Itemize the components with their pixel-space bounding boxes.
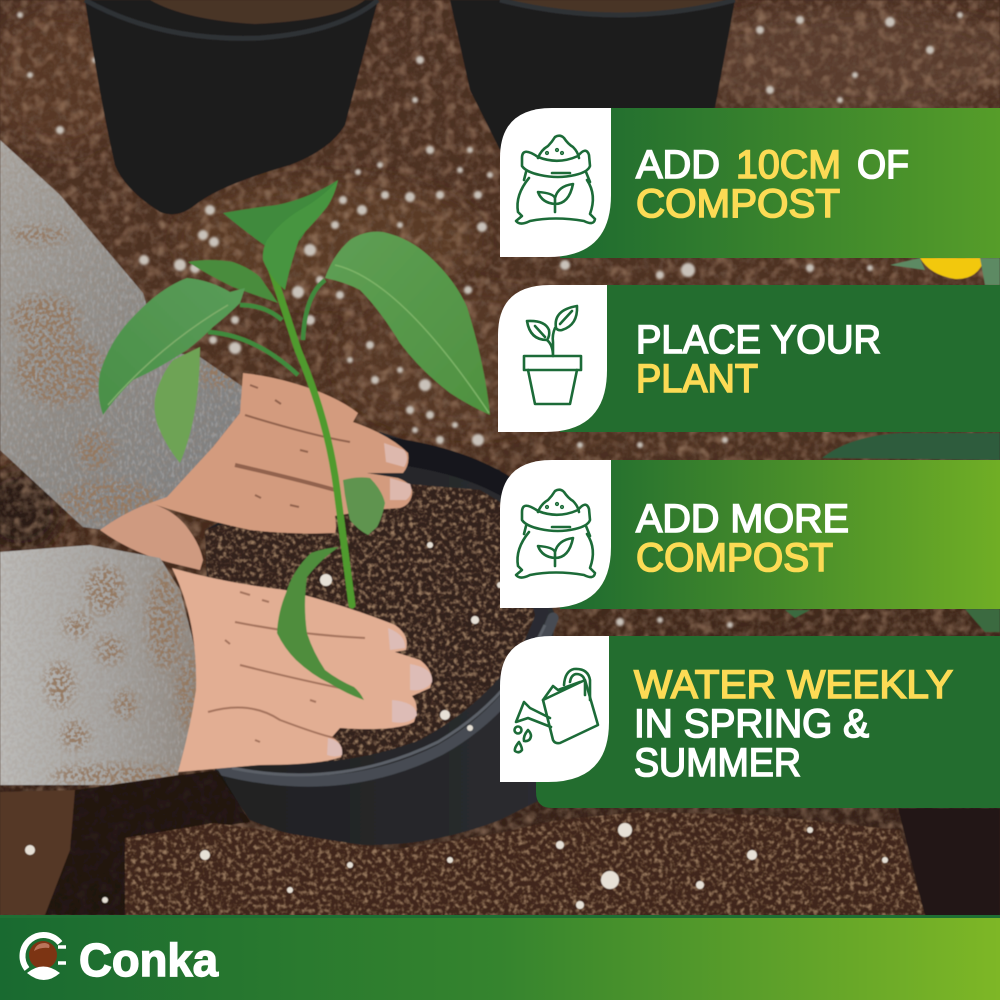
small side leaf bbox=[188, 260, 278, 303]
drooping lower leaf bbox=[277, 547, 364, 700]
lower sleeve texture and soil flecks bbox=[0, 550, 196, 786]
step 1 panel: add compost bbox=[500, 108, 1000, 258]
lower sleeve bbox=[0, 545, 203, 785]
potting soil texture bbox=[204, 484, 534, 762]
step 1 heading: OF bbox=[857, 143, 909, 187]
icon: compost bag bbox=[516, 136, 595, 224]
lower soil grain bbox=[120, 805, 930, 917]
left big leaf bbox=[99, 278, 245, 415]
main pot far rim bbox=[375, 436, 512, 500]
top right pot rim bbox=[500, 0, 735, 15]
top front leaf bbox=[263, 180, 338, 290]
step 1 heading: COMPOST bbox=[636, 182, 840, 226]
right large leaf bbox=[325, 232, 490, 415]
step 1 icon tile bbox=[500, 108, 611, 257]
upper sleeve bbox=[0, 140, 243, 530]
main pot soil bbox=[205, 480, 535, 762]
icon: Conka logo bbox=[22, 935, 66, 980]
icon: compost bag bbox=[516, 490, 595, 578]
footer bar bbox=[0, 915, 1000, 1000]
step 3 heading: COMPOST bbox=[636, 536, 833, 580]
footer background bbox=[0, 916, 1000, 1000]
icon: potted plant bbox=[524, 306, 581, 404]
step 4 heading bbox=[634, 663, 953, 785]
lower hand finger lines and dirt bbox=[208, 592, 365, 742]
main pot body bbox=[205, 432, 555, 845]
perlite specks bbox=[17, 12, 963, 628]
flower leaves bbox=[890, 258, 1000, 285]
pot rim highlight bbox=[232, 625, 545, 775]
step 3 band bbox=[560, 460, 1000, 609]
yellow flower bbox=[920, 258, 985, 279]
left leaf vein bbox=[108, 305, 228, 405]
lower hand nails bbox=[327, 628, 432, 756]
left soil clump bbox=[0, 790, 75, 915]
stem bbox=[270, 265, 352, 605]
step 4 heading: WATER WEEKLY bbox=[634, 663, 953, 707]
upper finger lines and dirt bbox=[235, 385, 350, 507]
step 4 panel: water weekly bbox=[500, 636, 1000, 808]
bottom soil mound bbox=[125, 812, 925, 915]
step 4 heading: SUMMER bbox=[634, 741, 801, 785]
upper hand palm bbox=[150, 373, 412, 534]
top left pot soil bbox=[150, 0, 365, 24]
step 3 heading: ADD MORE bbox=[636, 497, 849, 541]
step 2 heading: PLANT bbox=[636, 357, 758, 401]
step 3 heading bbox=[636, 497, 849, 580]
branches bbox=[208, 280, 325, 375]
step 2 panel: place your plant bbox=[498, 285, 1000, 432]
background foliage lower right bbox=[785, 609, 1000, 632]
step 2 heading bbox=[636, 318, 881, 401]
step 2 icon tile bbox=[498, 285, 607, 432]
top left pot bbox=[85, 0, 378, 214]
hanging leaf bbox=[154, 347, 200, 463]
top back leaf bbox=[223, 180, 338, 247]
step 2 band bbox=[560, 285, 1000, 432]
step 1 heading: 10CM bbox=[736, 143, 841, 187]
background foliage mid right bbox=[822, 433, 1000, 460]
leaf at stem bbox=[343, 477, 385, 535]
step 1 heading bbox=[636, 143, 909, 226]
seedling bbox=[99, 180, 490, 700]
icon: watering can bbox=[514, 669, 598, 752]
main pot near rim bbox=[222, 618, 553, 781]
upper nails bbox=[384, 443, 411, 500]
step 3 icon tile bbox=[500, 460, 611, 608]
step 3 panel: add more compost bbox=[500, 460, 1000, 609]
soil colour variation bbox=[0, 10, 1000, 550]
step 4 band bbox=[536, 636, 1000, 808]
step 4 icon tile bbox=[500, 636, 609, 782]
step 4 heading: IN SPRING & bbox=[634, 702, 869, 746]
top right pot bbox=[450, 0, 735, 150]
step 1 band bbox=[560, 108, 1000, 258]
lower hand bbox=[172, 568, 432, 772]
lower perlite bbox=[25, 542, 888, 909]
dark shadow under pot bbox=[45, 770, 250, 915]
step 1 heading: ADD bbox=[636, 143, 720, 187]
step 2 heading: PLACE YOUR bbox=[636, 318, 881, 362]
right leaf vein bbox=[335, 265, 489, 413]
back right pot in shadow bbox=[898, 808, 1000, 916]
upper hand thumb bbox=[100, 503, 203, 570]
footer top edge bbox=[0, 915, 1000, 918]
upper sleeve texture bbox=[0, 140, 250, 540]
logo wordmark: Conka bbox=[79, 934, 218, 986]
top left pot rim bbox=[85, 0, 378, 38]
